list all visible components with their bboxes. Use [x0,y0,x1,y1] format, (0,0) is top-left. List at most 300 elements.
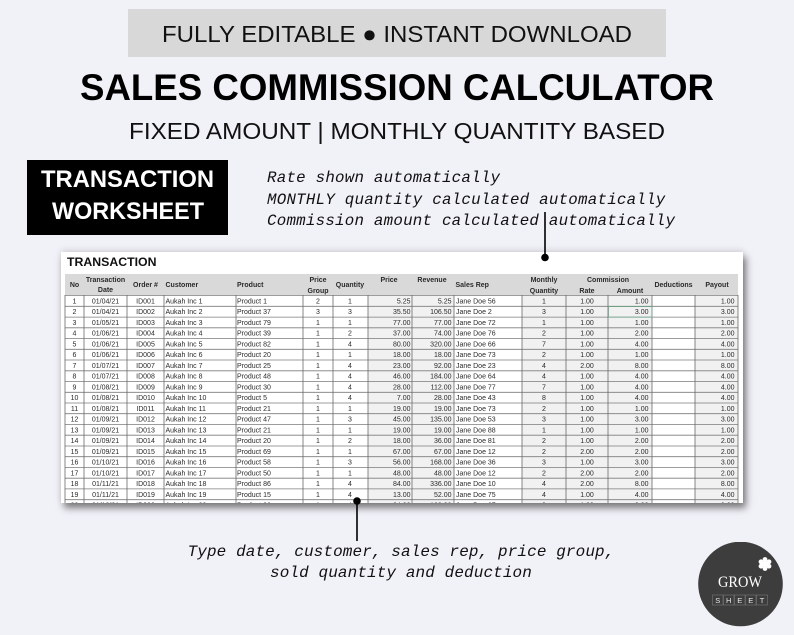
data rows: ID016 [136,460,155,467]
data rows: 2 [316,298,320,306]
data rows: 4.00 [635,384,649,391]
data rows: 1 [348,320,352,327]
data rows: 37.00 [393,331,411,338]
data rows: 4.00 [721,342,735,348]
data rows: 2.00 [580,470,594,477]
data rows: 13 [71,427,78,434]
data rows: 16 [71,460,78,467]
data rows: Product 1 [237,298,267,306]
data rows: 1 [316,374,320,381]
data rows: 3.00 [635,460,649,467]
data rows: 13.00 [393,492,411,499]
data rows: 1 [316,331,320,338]
data rows: 112.00 [431,384,452,391]
data rows: 2 [542,352,546,359]
data rows: 6 [73,352,77,359]
data rows: 11 [71,406,78,413]
worksheet label: TRANSACTION [41,166,214,193]
data rows: 7.00 [397,395,411,402]
icon: flower [759,557,771,571]
data rows: Product 37 [237,309,271,316]
data rows: 84.00 [393,481,411,488]
data rows: 3 [348,309,352,316]
logo: Grow Sheet [698,542,783,626]
data rows: 8.00 [635,363,649,370]
data rows: Jane Doe 64 [456,374,496,381]
data rows: 01/08/21 [92,395,119,402]
data rows: Product 50 [237,470,271,477]
data rows: Aukah Inc 3 [166,320,203,327]
header labels: Deductions [654,282,693,289]
data rows: 7 [542,384,546,391]
data rows: 4.00 [721,384,735,391]
data rows: 1 [316,417,320,424]
header labels: Rate [579,288,595,295]
data rows: 2.00 [635,449,649,456]
data rows: 1.00 [580,492,594,499]
data rows: Jane Doe 73 [456,406,496,413]
spreadsheet panel [61,252,743,503]
data rows: Aukah Inc 13 [166,427,206,434]
data rows: Aukah Inc 15 [166,449,206,456]
data rows: Product 79 [237,320,271,327]
data rows: Jane Doe 10 [456,481,496,488]
data rows: Aukah Inc 10 [166,395,206,402]
data rows: 01/11/21 [92,492,119,499]
data rows: Jane Doe 53 [456,417,496,424]
data rows: 7 [73,363,77,370]
data rows: 19.00 [434,427,452,434]
sheet title: TRANSACTION [67,255,157,269]
data rows: Aukah Inc 8 [166,374,203,381]
data rows: 1 [316,352,320,359]
data rows: Product 48 [237,374,271,381]
automatic notes: Rate shown automatically MONTHLY quantity calculated automatically Commission amount calculated automatically [267,169,675,230]
data rows: 48.00 [434,470,452,477]
data rows: 67.00 [434,449,452,456]
data rows: 1.00 [721,352,735,359]
data rows: 01/07/21 [92,363,119,370]
data rows: 1.00 [580,352,594,359]
data rows: 1.00 [635,298,649,306]
data rows: 168.00 [430,460,452,467]
data rows: 3 [316,309,320,316]
data rows: 1.00 [721,406,735,413]
data rows: Aukah Inc 17 [166,470,206,477]
data rows: 1 [348,427,352,434]
data rows: 1.00 [580,406,594,413]
data rows: Aukah Inc 6 [166,352,203,359]
data rows: 3 [542,460,546,467]
data rows: Aukah Inc 2 [166,309,203,316]
header labels: Amount [617,288,644,295]
data rows: 67.00 [393,449,411,456]
data rows: 7 [542,342,546,348]
header band [65,274,738,295]
data rows: 8 [73,374,77,381]
data rows: ID006 [136,352,155,359]
data rows: 1.00 [721,298,735,306]
data rows: 1.00 [721,427,735,434]
data rows: 19.00 [434,406,452,413]
data rows: ID011 [136,406,155,413]
shaded columns [368,296,738,503]
data rows: 01/09/21 [92,438,119,445]
data rows: 4 [348,481,352,488]
worksheet label [27,160,228,235]
data rows: 19.00 [393,427,411,434]
data rows: 1 [316,438,320,445]
data rows: 2.00 [580,449,594,456]
data rows: 1.00 [635,427,649,434]
header labels: Payout [705,282,729,289]
data rows: 01/10/21 [92,460,119,467]
data rows: 2.00 [721,438,735,445]
data rows: 5.25 [397,298,411,306]
input instructions: Type date, customer, sales rep, price group, sold quantity and deduction [188,543,614,582]
data rows: Product 21 [237,427,271,434]
data rows: 2 [542,406,546,413]
data rows: 2 [73,309,77,316]
data rows: ID009 [136,384,155,391]
data rows: Product 82 [237,342,271,348]
data rows: 1.00 [580,384,594,391]
data rows: Aukah Inc 19 [166,492,206,499]
data rows: ID010 [136,395,155,402]
data rows: 2.00 [635,470,649,477]
grid lines [65,296,738,500]
logo: Grow Sheet: GROW [718,574,762,591]
data rows: Aukah Inc 7 [166,363,203,370]
data rows: 135.00 [430,417,452,424]
data rows: 5.25 [438,298,452,306]
logo: Grow Sheet: E [748,596,753,605]
headline texts [80,21,714,144]
data rows: 1.00 [580,417,594,424]
data rows: 01/07/21 [92,374,119,381]
data rows: 8.00 [721,363,735,370]
data rows: 1 [316,363,320,370]
data rows: Jane Doe 76 [456,331,496,338]
data rows: ID017 [136,470,155,477]
header labels: Sales Rep [456,282,489,289]
data rows: ID004 [136,331,155,338]
header labels: Order # [133,282,158,289]
data rows: 1.00 [580,320,594,327]
data rows: 2 [542,449,546,456]
data rows: Aukah Inc 14 [166,438,206,445]
data rows: 01/08/21 [92,384,119,391]
header labels [70,277,729,295]
data rows: 1 [316,460,320,467]
data rows: 1.00 [580,298,594,306]
data rows: 74.00 [434,331,452,338]
data rows: 1 [348,449,352,456]
data rows: 3 [542,417,546,424]
data rows: Jane Doe 77 [456,384,496,391]
data rows: 1 [316,427,320,434]
data rows: 56.00 [393,460,411,467]
data rows: 77.00 [434,320,452,327]
data rows: Jane Doe 36 [456,460,496,467]
data rows: Product 20 [237,438,271,445]
header labels: Transaction [86,277,125,284]
data rows: 1.00 [580,374,594,381]
data rows: 1.00 [580,342,594,348]
data rows: 1 [316,384,320,391]
data rows: ID005 [136,342,155,348]
header labels: Quantity [530,288,558,295]
data rows: ID012 [136,417,155,424]
data rows: 01/05/21 [92,320,119,327]
logo: Grow Sheet: S [715,596,720,605]
data rows: 1.00 [580,460,594,467]
data rows: Jane Doe 72 [456,320,496,327]
data rows: 36.00 [434,438,452,445]
data rows: 8.00 [721,481,735,488]
header labels: Commission [587,277,629,284]
data rows: 2.00 [635,438,649,445]
data rows: Aukah Inc 12 [166,417,206,424]
data rows: Jane Doe 75 [456,492,496,499]
data rows: 46.00 [393,374,411,381]
data rows: 48.00 [393,470,411,477]
header labels: Monthly [531,277,558,284]
data rows: 4.00 [635,342,649,348]
data rows: 92.00 [434,363,452,370]
data rows: 3 [542,309,546,316]
data rows: 1.00 [580,331,594,338]
data rows: 19 [71,492,78,499]
data rows: 1.00 [635,406,649,413]
data rows: 2.00 [721,331,735,338]
data rows: Aukah Inc 4 [166,331,203,338]
data rows: 01/06/21 [92,331,119,338]
data rows: 1 [348,298,352,306]
top banner [128,9,666,57]
data rows: ID002 [136,309,155,316]
data rows: Aukah Inc 16 [166,460,206,467]
data rows: 1 [316,342,320,348]
data rows: Aukah Inc 1 [166,298,203,306]
data rows: 4.00 [721,395,735,402]
data rows: 3.00 [635,309,649,316]
data rows: 1 [316,395,320,402]
data rows: 01/04/21 [92,298,119,306]
data rows: 1 [348,470,352,477]
data rows: 3.00 [721,460,735,467]
arrow: notes to sheet [541,212,549,262]
data rows: 3.00 [721,309,735,316]
data rows: Product 5 [237,395,267,402]
title: SALES COMMISSION CALCULATOR [80,66,714,108]
worksheet label: WORKSHEET [52,198,204,225]
data rows: Jane Doe 81 [456,438,496,445]
data rows: 1.00 [635,352,649,359]
data rows: 2 [542,438,546,445]
data rows: 1.00 [580,427,594,434]
data rows: 8 [542,395,546,402]
data rows: Product 25 [237,363,271,370]
data rows: 1 [316,481,320,488]
data rows: ID015 [136,449,155,456]
data rows: 1 [348,406,352,413]
data rows: 2 [348,438,352,445]
data rows: 3.00 [721,417,735,424]
data rows: 10 [71,395,78,402]
data rows: 4.00 [635,395,649,402]
data rows: 4 [542,374,546,381]
data rows: Product 21 [237,406,271,413]
data rows: Jane Doe 56 [456,298,496,306]
data rows: 4.00 [635,492,649,499]
header labels: Price [380,277,398,284]
data rows: 18.00 [393,352,411,359]
data rows: Product 58 [237,460,271,467]
header labels: Product [237,282,264,289]
data rows: 17 [71,470,78,477]
data rows: 1 [316,470,320,477]
data rows: 2.00 [721,470,735,477]
header labels: Date [98,287,113,294]
data rows: Jane Doe 88 [456,427,496,434]
data rows: 2 [542,470,546,477]
data rows: Jane Doe 12 [456,470,496,477]
data rows: Product 69 [237,449,271,456]
data rows: 01/09/21 [92,417,119,424]
data rows: 1 [316,492,320,499]
data rows: 2.00 [580,363,594,370]
header labels: Customer [166,282,198,289]
data rows: Aukah Inc 11 [166,406,206,413]
data rows: 80.00 [393,342,411,348]
data rows: 3.00 [635,417,649,424]
data rows: 1 [316,406,320,413]
data rows: 1.00 [635,320,649,327]
data rows: ID008 [136,374,155,381]
data rows: 4 [348,492,352,499]
data rows: Product 86 [237,481,271,488]
data rows: 1 [316,320,320,327]
data rows: Product 20 [237,352,271,359]
logo: Grow Sheet: H [726,596,731,605]
data rows: 18 [71,481,78,488]
header labels: No [70,282,79,289]
data rows: 2 [542,331,546,338]
data rows: 4 [73,331,77,338]
data rows: 23.00 [393,363,411,370]
data rows: 4 [348,374,352,381]
data rows: 01/08/21 [92,406,119,413]
data rows: 2 [348,331,352,338]
data rows: 4.00 [721,492,735,499]
logo: Grow Sheet: E [737,596,742,605]
header labels: Quantity [336,282,364,289]
logo: Grow Sheet: T [760,596,765,605]
data rows: 1.00 [580,309,594,316]
data rows: ID014 [136,438,155,445]
data rows: 01/11/21 [92,481,119,488]
selected cell [608,307,652,317]
data rows: Product 39 [237,331,271,338]
data rows: 1.00 [580,438,594,445]
data rows [71,298,735,510]
data rows: 1 [542,298,546,306]
data rows: 4 [542,363,546,370]
data rows: Jane Doe 2 [456,309,492,316]
data rows: ID001 [136,298,155,306]
data rows: 28.00 [434,395,452,402]
data rows: 28.00 [393,384,411,391]
data rows: 4.00 [635,374,649,381]
data rows: 4 [542,481,546,488]
data rows: 01/09/21 [92,427,119,434]
data rows: 2.00 [721,449,735,456]
data rows: Aukah Inc 18 [166,481,206,488]
data rows: 2.00 [580,481,594,488]
data rows: 4 [348,395,352,402]
arrow: sheet to input note [353,497,361,541]
data rows: 01/06/21 [92,342,119,348]
data rows: 106.50 [430,309,452,316]
data rows: Aukah Inc 5 [166,342,203,348]
data rows: ID013 [136,427,155,434]
header labels: Group [308,288,328,295]
data rows: ID019 [136,492,155,499]
data rows: ID007 [136,363,155,370]
data rows: 1 [316,449,320,456]
data rows: 01/09/21 [92,449,119,456]
subtitle: FIXED AMOUNT | MONTHLY QUANTITY BASED [129,118,665,144]
data rows: 9 [73,384,77,391]
data rows: 4 [348,384,352,391]
data rows: 4 [348,342,352,348]
data rows: 184.00 [430,374,452,381]
header labels: Price [309,277,327,284]
data rows: 1.00 [580,395,594,402]
data rows: 52.00 [434,492,452,499]
data rows: 12 [71,417,78,424]
data rows: 1 [542,320,546,327]
data rows: 1 [348,352,352,359]
data rows: 77.00 [393,320,411,327]
data rows: 1.00 [721,320,735,327]
data rows: 18.00 [434,352,452,359]
data rows: 336.00 [430,481,452,488]
data rows: Jane Doe 12 [456,449,496,456]
data rows: 01/10/21 [92,470,119,477]
data rows: ID003 [136,320,155,327]
data rows: 2.00 [635,331,649,338]
data rows: 45.00 [393,417,411,424]
data rows: 01/06/21 [92,352,119,359]
data rows: 4 [348,363,352,370]
data rows: Jane Doe 73 [456,352,496,359]
data rows: Jane Doe 23 [456,363,496,370]
data rows: 19.00 [393,406,411,413]
data rows: ID018 [136,481,155,488]
data rows: Jane Doe 66 [456,342,496,348]
data rows: 35.50 [393,309,411,316]
data rows: 1 [73,298,77,306]
header labels: Revenue [417,277,447,284]
data rows: 01/04/21 [92,309,119,316]
data rows: Product 15 [237,492,271,499]
data rows: 3 [73,320,77,327]
data rows: 14 [71,438,78,445]
data rows: 3 [348,460,352,467]
data rows: Aukah Inc 9 [166,384,203,391]
